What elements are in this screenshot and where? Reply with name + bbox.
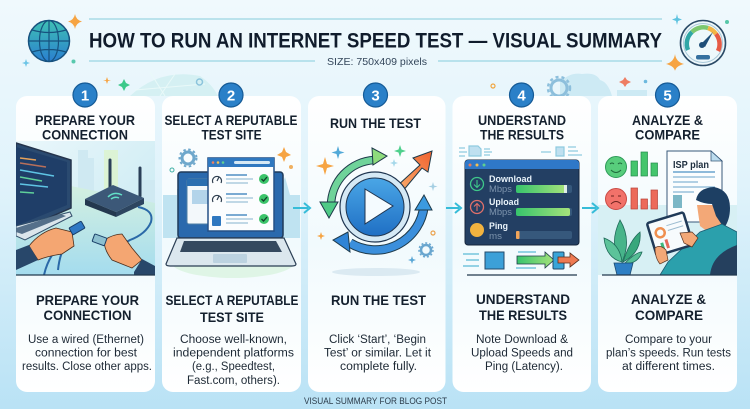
body: select a reputable test site [166,292,298,387]
illustration: comparing results to ISP plan [598,151,737,275]
results dashboard: Mbps [489,207,513,217]
body: understand the results: UNDERSTAND [476,291,570,307]
arrow: step 3 to step 4 [446,203,461,213]
body: run the test: complete fully. [340,361,417,373]
illustration: play button with cycling arrows [316,145,438,276]
heading: analyze and compare: COMPARE [635,126,700,142]
body: run the test [324,292,432,373]
body: analyze and compare [606,291,731,373]
heading: select a reputable test site [164,112,298,142]
subtitle: size note: SIZE: 750x409 pixels [327,56,427,68]
heading: run the test: RUN THE TEST [330,115,421,131]
body: select a reputable test site: SELECT A REPUTABLE [166,292,298,308]
title: HOW TO RUN AN INTERNET SPEED TEST — VISUAL SUMMARY [89,30,662,52]
heading: analyze and compare: ANALYZE & [632,112,703,128]
body: run the test: Click ‘Start’, ‘Begin [329,334,426,346]
panel: step 4 understand the results [452,83,591,392]
heading: understand the results [478,112,566,142]
illustration: comparing results to ISP plan: ISP plan [673,160,709,171]
body: select a reputable test site: Fast.com, others). [187,375,280,387]
body: select a reputable test site: TEST SITE [200,309,264,325]
icon: globe [22,14,82,67]
header rules [89,19,662,61]
body: prepare your connection [22,292,152,373]
body: select a reputable test site: Choose well-known, [180,334,287,346]
body: prepare your connection: CONNECTION [44,307,132,323]
body: understand the results [471,291,573,373]
body: understand the results: Upload Speeds and [471,348,573,360]
background network globe and cloud decoration [130,72,647,96]
body: select a reputable test site: (e.g., Speedtest, [192,361,275,373]
body: analyze and compare: ANALYZE & [631,291,706,307]
body: analyze and compare: plan’s speeds. Run tests [606,348,731,360]
results dashboard [465,160,579,245]
step badge 3: 3 [371,88,380,104]
icons: data flow below dashboard [463,252,579,275]
arrow: step 2 to step 3 [293,203,310,213]
step badge 5: 5 [663,88,672,104]
body: analyze and compare: COMPARE [635,307,703,323]
panel: step 3 run the test [308,83,446,392]
heading: select a reputable test site: TEST SITE [202,126,262,142]
icon: speed gauge [666,14,729,71]
heading: prepare your connection: PREPARE YOUR [35,112,135,128]
decorative sparkles above cards [103,77,647,99]
results dashboard: Ping [489,221,508,232]
results dashboard: ms [489,231,503,241]
step badge 2 [219,83,243,107]
illustration: laptop with test site list [163,147,300,278]
arrow: step 4 to step 5 [582,203,598,213]
body: select a reputable test site: independent platforms [173,348,294,360]
body: understand the results: Ping (Latency). [485,361,563,373]
body: prepare your connection: results. Close other apps. [22,361,152,373]
heading: understand the results: UNDERSTAND [478,112,566,128]
step badge 1: 1 [81,88,89,104]
illustration: laptop, router and ethernet cable [16,141,155,276]
heading: analyze and compare [632,112,703,142]
panel: step 1 prepare your connection [16,83,155,392]
step badge 2: 2 [227,88,235,104]
results dashboard: Download [489,174,532,185]
heading: understand the results: THE RESULTS [480,126,564,142]
panel: step 5 analyze and compare [598,83,737,392]
step badge 3 [364,83,388,107]
footer note: VISUAL SUMMARY FOR BLOG POST [304,396,447,406]
body: prepare your connection: Use a wired (Ethernet) [28,334,144,346]
body: understand the results: Note Download & [476,334,568,346]
panel: step 2 select a reputable test site [162,83,301,392]
heading: select a reputable test site: SELECT A REPUTABLE [164,112,298,128]
step badge 1 [73,83,97,107]
body: run the test: RUN THE TEST [331,292,426,308]
body: understand the results: THE RESULTS [479,307,567,323]
results dashboard: Upload [489,197,519,208]
body: analyze and compare: Compare to your [625,334,712,346]
step badge 5 [656,83,680,107]
body: run the test: Test’ or similar. Let it [324,348,432,360]
step badge 4: 4 [517,88,526,104]
heading: prepare your connection [35,112,135,142]
body: analyze and compare: at different times. [622,361,715,373]
body: prepare your connection: PREPARE YOUR [36,292,139,308]
heading: prepare your connection: CONNECTION [42,126,128,142]
step badge 4 [510,83,534,107]
icons: document flow above dashboard [459,146,582,156]
body: prepare your connection: connection for best [35,348,138,360]
results dashboard: Mbps [489,184,513,194]
